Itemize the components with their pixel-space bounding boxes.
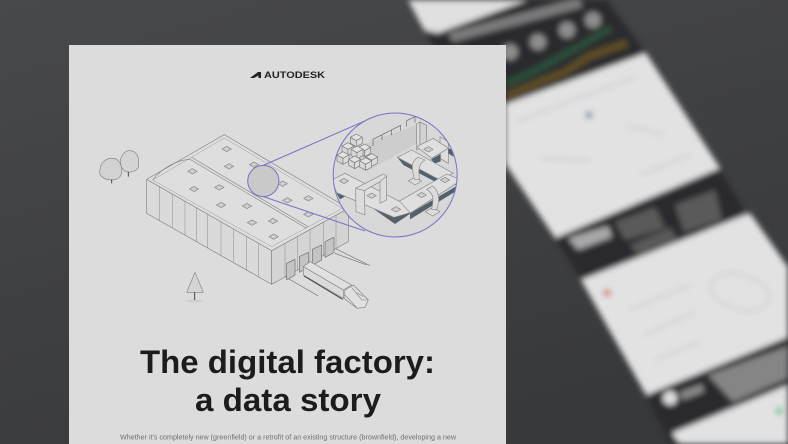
blurred infographic strip in background	[408, 0, 788, 444]
truck cab	[344, 285, 368, 308]
strip: white panel one	[506, 53, 720, 238]
magnified view: factory interior	[332, 113, 462, 237]
strip: blue marker	[585, 111, 593, 119]
title: The digital factory:	[140, 344, 435, 380]
icon: delivery truck	[303, 262, 368, 308]
logo: Autodesk	[250, 70, 325, 81]
floor shadow zone	[358, 126, 416, 172]
roof curved valley	[153, 159, 190, 180]
factory left wall panel lines	[159, 187, 258, 277]
factory right wall panel lines	[285, 215, 336, 277]
lens outline	[333, 113, 457, 237]
strip: orange chart band	[507, 43, 627, 96]
upper right gantry	[417, 122, 453, 163]
strip: top grey heading band	[448, 0, 583, 42]
fence railing	[373, 117, 415, 146]
icon: two round trees	[100, 151, 139, 183]
factory building	[147, 135, 348, 284]
factory left wall	[147, 179, 272, 284]
strip: white circle logo in band three	[663, 391, 677, 405]
strip: faint text in panel one	[515, 77, 690, 175]
strip: dark band two blocks	[615, 190, 722, 255]
strip: red marker	[603, 289, 611, 297]
factory right wall	[272, 208, 348, 284]
truck trailer	[303, 262, 352, 290]
strip: green chart band	[507, 28, 611, 84]
lower conveyor left run	[332, 173, 411, 224]
page: white sheet	[69, 45, 506, 444]
strip: grey text block in band three	[708, 346, 788, 402]
small selection circle on roof	[248, 165, 279, 197]
factory roof	[147, 135, 348, 251]
ground lines at loading dock	[285, 248, 370, 296]
robot arm lower	[425, 186, 440, 216]
lower conveyor right run	[398, 174, 462, 219]
stack of boxes	[337, 134, 378, 170]
title	[140, 344, 435, 418]
lens background	[333, 113, 457, 237]
icon: pine tree	[187, 272, 203, 302]
connector lines from roof to magnified view	[263, 120, 367, 231]
truck chassis	[304, 276, 343, 299]
strip: small label in band three	[680, 384, 704, 400]
strip: dark band sections	[410, 0, 788, 444]
loading dock doors	[287, 237, 334, 280]
upper conveyor	[397, 138, 457, 185]
roof skylights	[188, 146, 313, 239]
roof inner border	[153, 138, 342, 247]
strip: white panel two	[581, 213, 788, 395]
roof ridge double line	[190, 157, 309, 228]
icon: Autodesk A mark	[250, 72, 261, 78]
robot arm upper	[408, 157, 425, 185]
strip: light label in dark band two	[568, 226, 612, 250]
intro text: Whether it's completely new (greenfield) or a retrofit of an existing structure (brownfield), developing a new	[120, 434, 457, 442]
strip: green marker	[775, 407, 783, 415]
illustration: factory scene	[100, 135, 370, 308]
strip: white panel three	[672, 385, 788, 444]
title: a data story	[195, 382, 381, 418]
lower left gantry	[356, 174, 387, 215]
strip: top white panel	[408, 0, 527, 33]
strip: faint content in panel two	[630, 268, 773, 360]
logo wordmark: AUTODESK	[264, 70, 325, 81]
strip: four stat circles	[502, 12, 601, 60]
